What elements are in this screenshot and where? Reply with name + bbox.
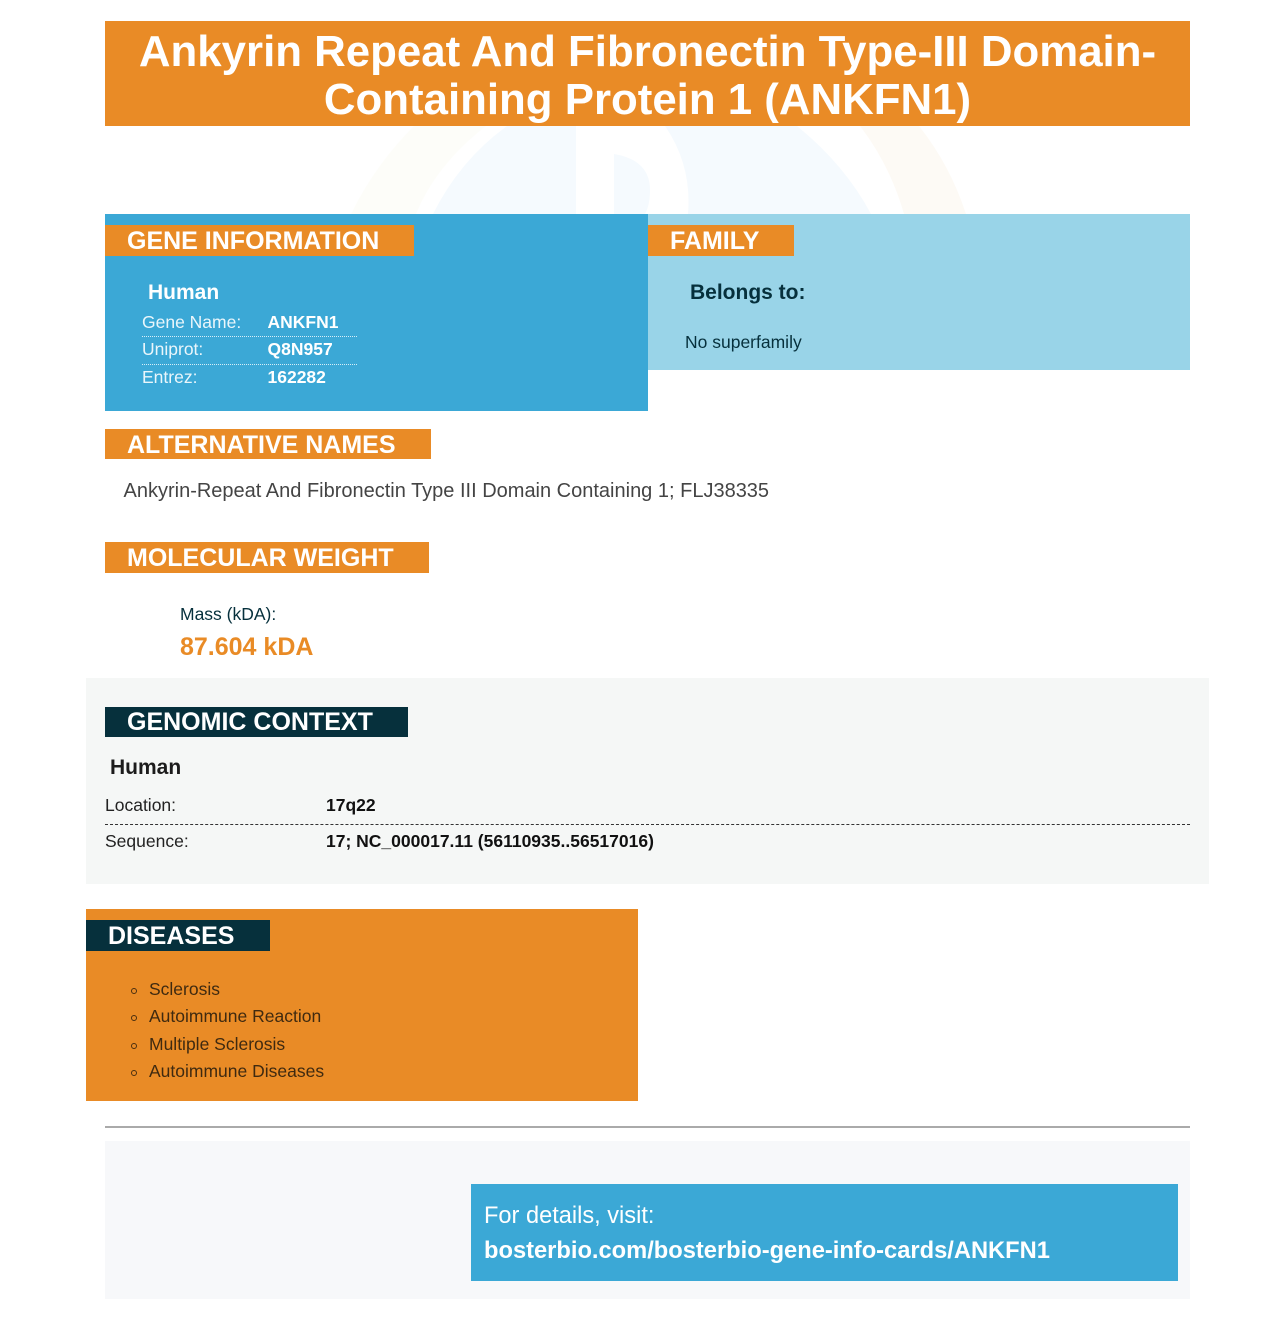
callout url: bosterbio.com/bosterbio-gene-info-cards/ANKFN1 bbox=[484, 1238, 1050, 1264]
alternative names text: Ankyrin-Repeat And Fibronectin Type III Domain Containing 1; FLJ38335 bbox=[124, 480, 769, 502]
row: entrez: Entrez: bbox=[142, 367, 197, 387]
heading: genomic context: GENOMIC CONTEXT bbox=[127, 708, 373, 736]
family value: No superfamily bbox=[685, 332, 802, 352]
heading: family: FAMILY bbox=[670, 227, 759, 255]
row: uniprot: Uniprot: bbox=[142, 339, 203, 359]
heading: diseases bbox=[86, 920, 270, 951]
species label: Human bbox=[110, 756, 181, 779]
belongs to label: Belongs to: bbox=[690, 281, 806, 304]
mass value: 87.604 kDA bbox=[180, 633, 313, 661]
row: uniprot bbox=[142, 338, 357, 365]
panel: footer bbox=[105, 1141, 1190, 1299]
heading: diseases: DISEASES bbox=[108, 922, 234, 950]
row: sequence: Sequence: bbox=[105, 831, 189, 851]
panel: family bbox=[648, 214, 1190, 370]
heading: alternative names: ALTERNATIVE NAMES bbox=[127, 431, 396, 459]
row: sequence bbox=[105, 831, 654, 851]
item: autoimmune diseases: Autoimmune Diseases bbox=[149, 1061, 324, 1081]
row: location: Location: bbox=[105, 795, 176, 815]
row: entrez: 162282 bbox=[268, 367, 326, 387]
row: gene name: Gene Name: bbox=[142, 312, 241, 332]
row: location: 17q22 bbox=[326, 795, 376, 815]
callout text: For details, visit: bbox=[484, 1203, 654, 1229]
mass label: Mass (kDA): bbox=[180, 604, 276, 624]
title: Containing Protein 1 (ANKFN1) bbox=[324, 75, 971, 124]
heading: family bbox=[648, 225, 794, 256]
row: uniprot: Q8N957 bbox=[268, 339, 333, 359]
panel: diseases bbox=[86, 909, 638, 1101]
callout: details link bbox=[471, 1184, 1178, 1281]
row: location bbox=[105, 794, 1190, 825]
item: sclerosis: Sclerosis bbox=[149, 979, 220, 999]
title bbox=[105, 21, 1190, 126]
title: Ankyrin Repeat And Fibronectin Type-III Domain- bbox=[139, 27, 1156, 76]
panel: genomic context bbox=[86, 678, 1209, 884]
background watermark logo bbox=[434, 126, 966, 214]
row: gene name bbox=[142, 311, 357, 337]
item: multiple sclerosis: Multiple Sclerosis bbox=[149, 1034, 285, 1054]
heading: molecular weight: MOLECULAR WEIGHT bbox=[127, 544, 394, 572]
row: entrez bbox=[142, 367, 326, 387]
species label: Human bbox=[148, 281, 219, 304]
panel: gene information bbox=[105, 214, 648, 411]
row: gene name: ANKFN1 bbox=[268, 312, 338, 332]
disease list bbox=[131, 979, 324, 1081]
item: autoimmune reaction: Autoimmune Reaction bbox=[149, 1006, 321, 1026]
row: sequence: 17; NC_000017.11 (56110935..56517016) bbox=[326, 831, 654, 851]
heading: gene information: GENE INFORMATION bbox=[127, 227, 379, 255]
